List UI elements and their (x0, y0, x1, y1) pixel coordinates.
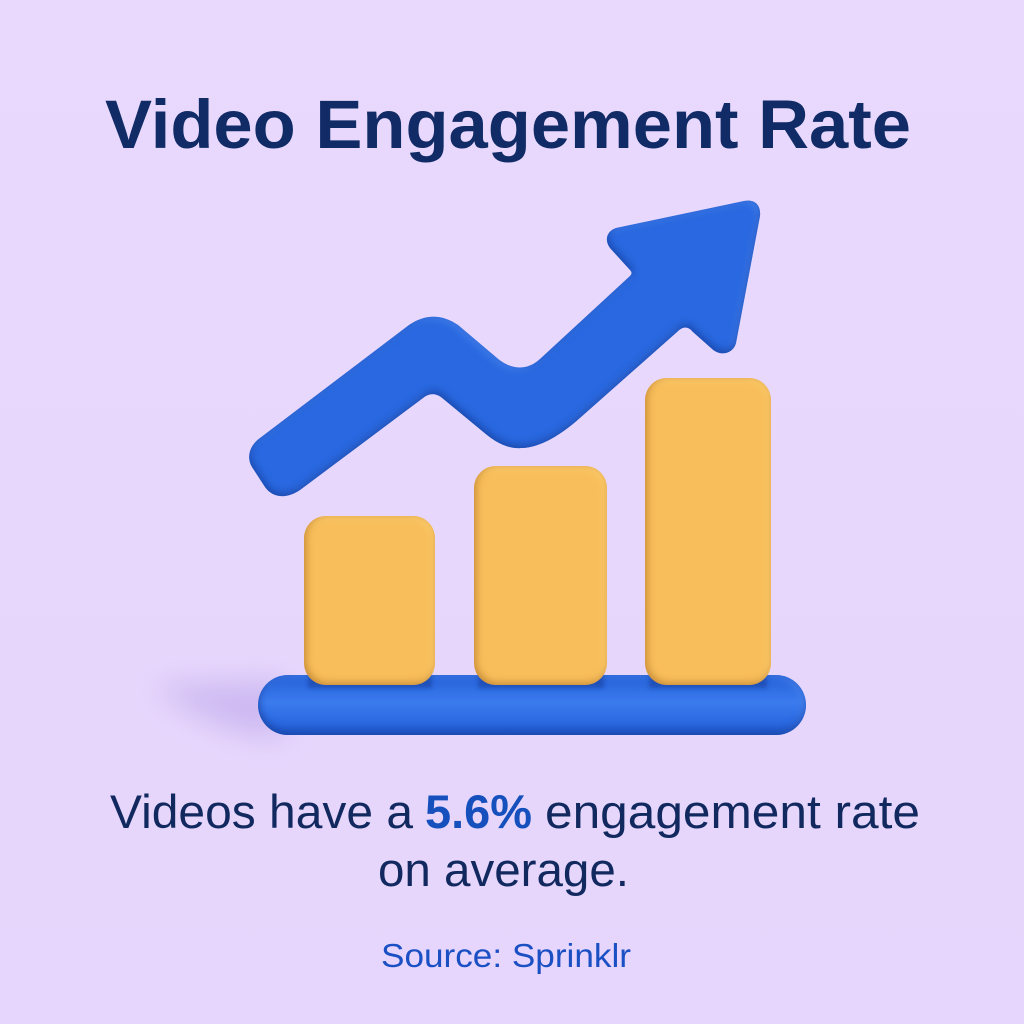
description text: on average. (378, 843, 629, 896)
description text (110, 785, 920, 896)
source: Source: Sprinklr (381, 937, 631, 974)
chart illustration (150, 201, 806, 738)
title: Video Engagement Rate (105, 86, 911, 163)
description text: 5.6% (425, 785, 532, 838)
ground shadow (150, 680, 285, 738)
bar 2 (474, 466, 607, 685)
arrow (249, 201, 760, 496)
bar 3 (645, 378, 771, 685)
base platform (258, 675, 806, 735)
bar 1 (304, 516, 435, 685)
description text: engagement rate (545, 785, 920, 838)
bar contact shadows (308, 676, 767, 688)
description text: Videos have a (110, 785, 414, 838)
